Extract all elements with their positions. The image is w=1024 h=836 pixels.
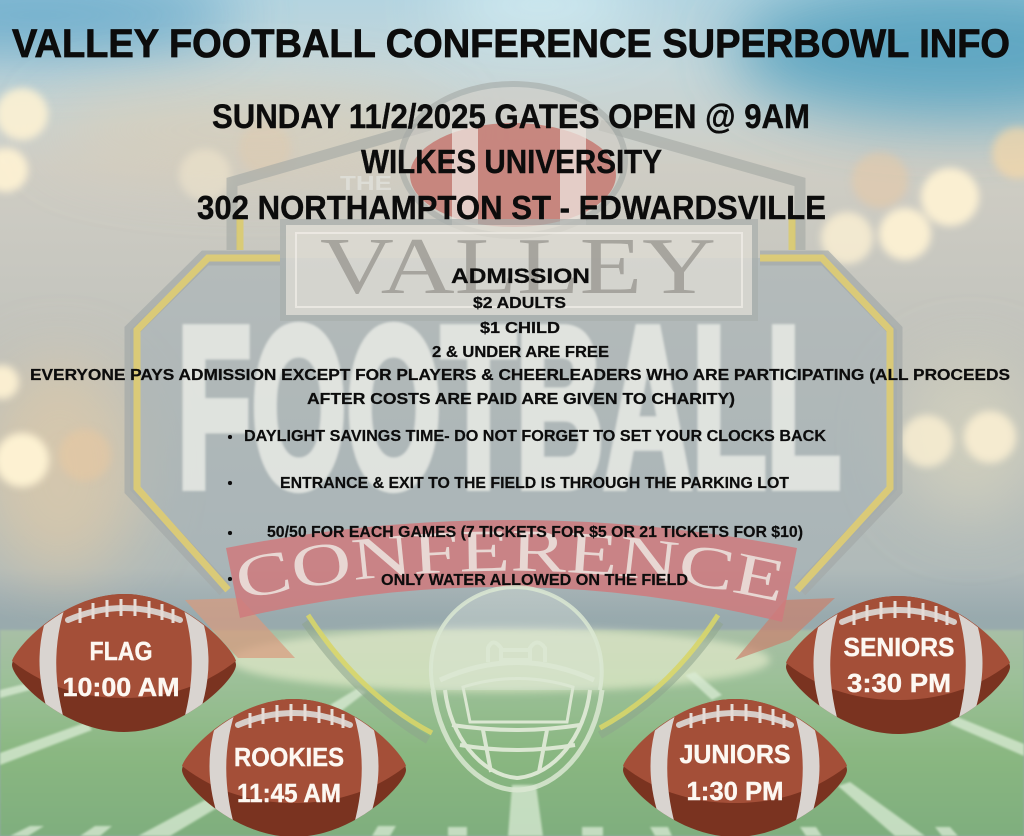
football: Rookies 11:45 AM: 11:45 AM — [237, 778, 341, 808]
football: Flag 10:00 AM: 10:00 AM — [62, 672, 180, 702]
logo: football emblem: THE — [340, 173, 392, 195]
logo watermark: Valley Football Conference — [124, 81, 902, 792]
bullet list: 50/50 FOR EACH GAMES (7 TICKETS FOR $5 OR 21 TICKETS FOR $10) — [267, 524, 803, 541]
logo: football emblem — [340, 84, 625, 236]
football: Flag 10:00 AM: FLAG — [90, 636, 152, 666]
logo: helmet — [431, 587, 602, 790]
football: Seniors 3:30 PM — [786, 595, 1010, 735]
bullet list: ONLY WATER ALLOWED ON THE FIELD — [381, 572, 688, 589]
admission details: 2 & UNDER ARE FREE — [432, 344, 609, 361]
logo: shield lower yellow edges — [305, 615, 720, 740]
logo: shield body — [130, 258, 897, 590]
event details — [197, 98, 826, 226]
event details: 302 NORTHAMPTON ST - EDWARDSVILLE — [197, 189, 826, 226]
football: Juniors 1:30 PM: JUNIORS — [680, 739, 790, 769]
logo: Valley plate — [283, 222, 755, 318]
logo: shield outline — [132, 125, 895, 590]
admission details: $2 ADULTS — [473, 295, 566, 312]
bullet list: ENTRANCE & EXIT TO THE FIELD IS THROUGH THE PARKING LOT — [280, 475, 789, 492]
football: Flag 10:00 AM — [12, 593, 236, 733]
admission details: EVERYONE PAYS ADMISSION EXCEPT FOR PLAYERS & CHEERLEADERS WHO ARE PARTICIPATING (ALL PROCEEDS — [30, 367, 1010, 384]
event details: WILKES UNIVERSITY — [361, 143, 662, 180]
admission details: ADMISSION — [451, 265, 590, 288]
logo: Conference banner: CONFERENCE — [239, 531, 781, 601]
football: Juniors 1:30 PM — [623, 698, 847, 836]
football: Seniors 3:30 PM: SENIORS — [844, 632, 954, 662]
logo: Valley plate: VALLEY — [320, 223, 716, 311]
football: Rookies 11:45 AM: ROOKIES — [234, 742, 344, 772]
bullet list: DAYLIGHT SAVINGS TIME- DO NOT FORGET TO SET YOUR CLOCKS BACK — [244, 428, 826, 445]
football: Seniors 3:30 PM: 3:30 PM — [847, 668, 951, 698]
event details: SUNDAY 11/2/2025 GATES OPEN @ 9AM — [212, 98, 810, 136]
football: Juniors 1:30 PM: 1:30 PM — [686, 776, 784, 806]
admission details: AFTER COSTS ARE PAID ARE GIVEN TO CHARITY) — [307, 391, 735, 408]
logo: Conference banner — [185, 520, 835, 660]
admission details: $1 CHILD — [480, 320, 560, 337]
admission details — [30, 265, 1010, 408]
football: Rookies 11:45 AM — [182, 698, 406, 836]
bullet list — [228, 428, 826, 589]
